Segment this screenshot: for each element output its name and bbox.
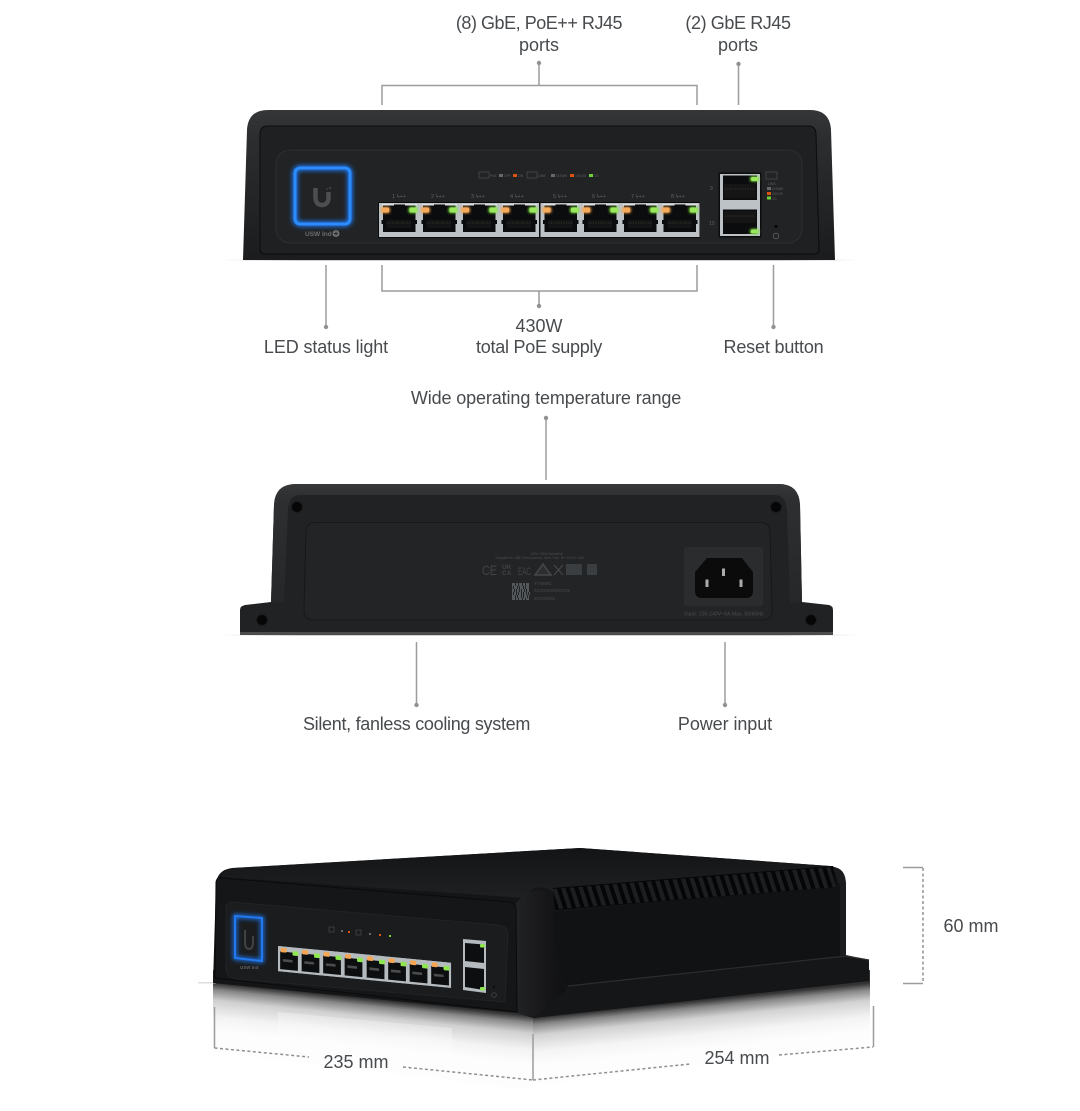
chassis (243, 110, 835, 260)
label: reset button: Reset button (723, 337, 824, 357)
port numbers: 1 ϟ++ (392, 194, 406, 200)
label: 60 mm: 60 mm (943, 916, 999, 936)
port numbers (392, 194, 685, 200)
right LED legend: LINK (768, 182, 776, 186)
dimension: height bracket (903, 868, 923, 984)
front inset panel (226, 902, 508, 1002)
label: cooling system: Silent, fanless cooling system (303, 714, 530, 734)
label: total PoE supply: 430W (515, 316, 563, 336)
chassis silhouette (213, 848, 869, 1018)
label: 2 GbE ports: (2) GbE RJ45 (685, 13, 791, 33)
front face (215, 878, 517, 1012)
dimension: centre vertical (532, 1034, 534, 1080)
serial text: YYWWC (534, 581, 552, 586)
label: total PoE supply: total PoE supply (476, 337, 602, 357)
leader: PoE supply bracket (382, 265, 697, 308)
panel: perspective view with dimensions (198, 848, 870, 1090)
compliance marks: CE (482, 562, 497, 578)
serial text (534, 581, 570, 601)
port group: 2 RJ45 ports (718, 172, 762, 238)
ventilation slots (550, 866, 839, 910)
front recessed plate (260, 126, 819, 254)
port inset panel (276, 150, 802, 243)
icon: reset button (773, 225, 779, 239)
flange (533, 955, 869, 1018)
leader: power input (723, 642, 727, 707)
port numbers: 5 ϟ++ (553, 194, 567, 200)
port numbers: 2 ϟ++ (431, 194, 445, 200)
port group: 8 ports in perspective (278, 946, 451, 988)
front side corner (515, 890, 566, 1018)
regulatory text: M/N: USW-Industrial (531, 552, 563, 556)
serial text: XXXXXXX (534, 596, 555, 601)
model label: USW Ind (305, 231, 332, 238)
QR code (512, 584, 530, 599)
label: power input: Power input (678, 714, 772, 734)
port numbers: 4 ϟ++ (510, 194, 524, 200)
rear chassis (240, 484, 833, 635)
LED legend: LINK (538, 174, 546, 178)
label: 2 GbE ports: ports (718, 35, 758, 55)
icon: LED status square with Ubiquiti logo (295, 168, 350, 224)
floor line (222, 260, 858, 261)
LED legend (479, 172, 599, 178)
panel: front view of switch (222, 110, 858, 261)
rear top bevel (271, 484, 802, 603)
top face (222, 848, 840, 898)
leader: LED status light (324, 265, 328, 329)
dimension: width right (533, 1006, 874, 1080)
right LED legend (766, 172, 784, 201)
label: 8 GbE PoE ports: ports (519, 35, 559, 55)
port numbers: 3 ϟ++ (471, 194, 485, 200)
right port numbers: 9 (710, 186, 713, 192)
LED legend strip (329, 927, 391, 937)
flange highlight (568, 956, 869, 986)
label: 254 mm: 254 mm (704, 1048, 770, 1068)
label: LED status light: LED status light (264, 337, 388, 357)
port group: 2 ports in perspective (463, 939, 486, 993)
side rear corner (833, 867, 846, 957)
dimension: depth left (214, 1007, 533, 1080)
screw holes (256, 502, 816, 626)
compliance marks: UK (502, 564, 512, 571)
icon: power inlet (684, 547, 763, 606)
rear recessed panel (304, 522, 772, 620)
leader: 8 port bracket (382, 61, 697, 105)
floor line (222, 634, 858, 636)
leader: temperature range (544, 416, 548, 480)
label: 8 GbE PoE ports: (8) GbE, PoE++ RJ45 (456, 13, 623, 33)
power rating text: Input: 100-240V~6A Max, 50/60Hz (684, 612, 764, 618)
LED legend: ON (518, 174, 524, 178)
side face (553, 885, 846, 987)
floor reflection (198, 970, 870, 1090)
panel: rear view of switch (222, 484, 858, 636)
LED legend: 1G (594, 174, 599, 178)
serial text: XXXXXXXXXXXX (534, 588, 570, 593)
LED legend: PoE (490, 174, 497, 178)
port group: 8 PoE RJ45 ports (378, 202, 700, 238)
label: 235 mm: 235 mm (323, 1052, 389, 1072)
port numbers: 6 ϟ++ (592, 194, 606, 200)
label: temperature range: Wide operating temperature range (411, 388, 681, 408)
model label: USW Ind (240, 965, 259, 970)
port numbers: 7 ϟ++ (631, 194, 645, 200)
regulatory text (496, 552, 585, 560)
right LED legend: 10/100 (772, 192, 783, 196)
compliance marks (482, 562, 597, 578)
port numbers: 8 ϟ++ (671, 194, 685, 200)
icon: LED square (235, 916, 262, 961)
right port numbers (709, 186, 715, 227)
regulatory text: Ubiquiti Inc. 685 Third Avenue, New York, NY 10017 USA (496, 556, 585, 560)
leader: reset button (771, 265, 776, 329)
LED legend: 10/100 (575, 174, 586, 178)
leader: cooling system (414, 642, 419, 707)
right LED legend: 1G (772, 197, 777, 201)
LED legend: DOWN (556, 174, 568, 178)
compliance marks: EAC (518, 566, 531, 578)
icon: reset button (492, 986, 496, 997)
LED legend: OFF (504, 174, 511, 178)
right LED legend: DOWN (772, 187, 784, 191)
compliance marks: CA (502, 570, 512, 577)
bottom edge highlight (240, 632, 833, 635)
leader: 2 port line (736, 62, 741, 105)
icon: plus badge (332, 230, 340, 237)
right port numbers: 10 (709, 221, 715, 227)
